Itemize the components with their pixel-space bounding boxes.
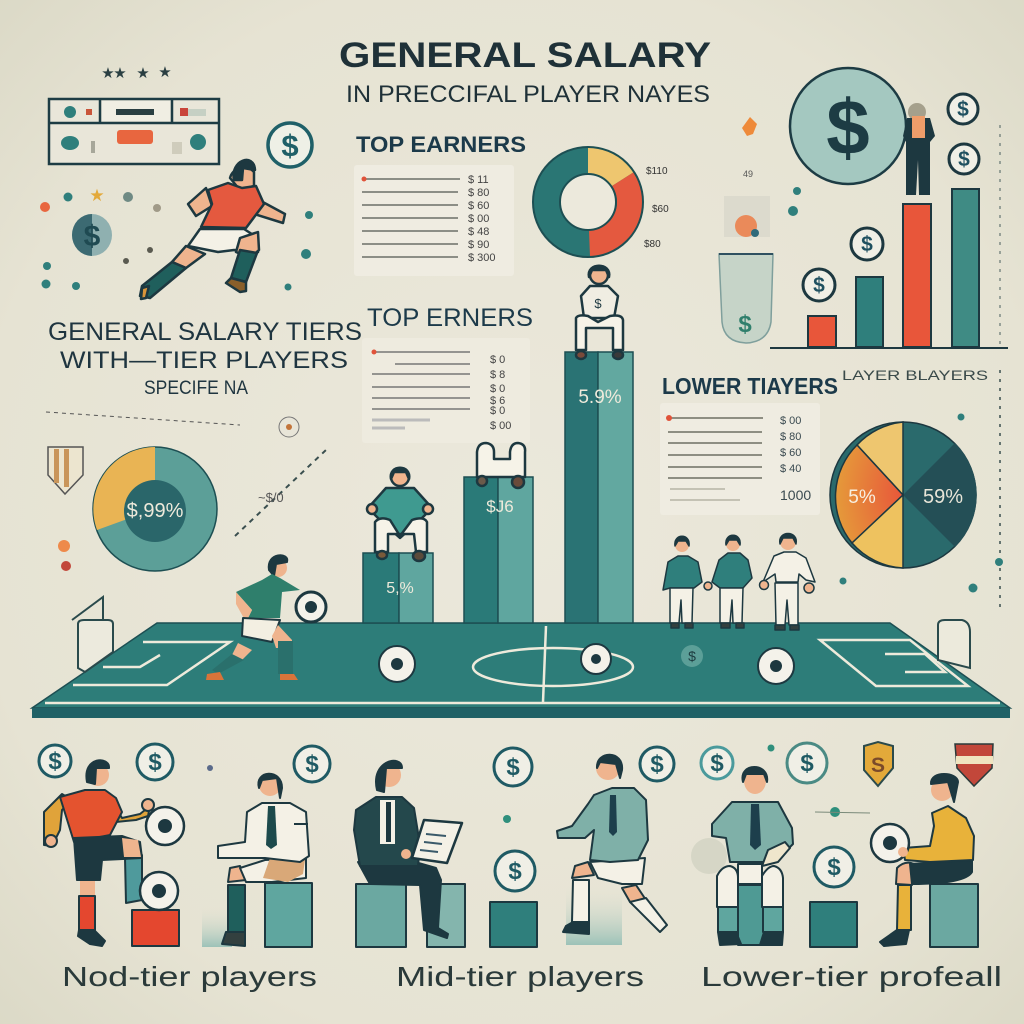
heading: top erners: TOP ERNERS xyxy=(367,304,533,332)
icon: dollar coin left with star: ★ xyxy=(89,186,105,205)
panel: lower tier table xyxy=(660,403,820,515)
panel: football field: $ xyxy=(688,648,696,664)
bar chart with coins: $ xyxy=(957,98,969,121)
figure: blue jacket seated xyxy=(691,767,857,947)
small label: dashed trend xyxy=(46,412,326,571)
icon: seated player top xyxy=(576,266,623,359)
bar chart with coins: $ xyxy=(861,233,873,256)
chart: donut top: $60 xyxy=(652,204,669,215)
icons: bottom dollar coins: $ xyxy=(827,854,841,881)
icon: stars: ★ xyxy=(113,65,127,82)
icons: bottom dollar coins: $ xyxy=(650,751,664,778)
icons: bottom dollar coins: $ xyxy=(305,751,319,778)
icons: bottom dollar coins: $ xyxy=(148,749,162,776)
icon: shields bottom right: S xyxy=(871,754,885,777)
panel: top earners table 1 xyxy=(354,165,514,276)
panel: top earners table 2: $ 00 xyxy=(490,420,511,432)
chart: pie right xyxy=(830,422,977,568)
heading: top earners: TOP EARNERS xyxy=(356,132,526,157)
panel: top earners table 1: $ 00 xyxy=(468,213,489,225)
caption: tier labels: Nod-tier players xyxy=(62,961,317,992)
chart: tall bars on field: 5,% xyxy=(386,580,414,597)
panel: football field xyxy=(32,623,1010,718)
panel: top earners table 2: $ 8 xyxy=(490,369,505,381)
icon: dollar coin top-left: $ xyxy=(281,128,299,163)
chart: donut top: $80 xyxy=(644,239,661,250)
icons: bottom dollar coins: $ xyxy=(508,858,522,885)
icons: bottom dollar coins: $ xyxy=(48,748,62,775)
icons: bottom dollar coins: $ xyxy=(710,750,724,777)
chart: pie right: 59% xyxy=(923,486,963,508)
icon: stars: ★ xyxy=(158,64,172,81)
icons: bottom dollar coins: $ xyxy=(800,750,814,777)
heading: general salary tiers: GENERAL SALARY TIERS xyxy=(48,318,362,346)
text: layer blayers: LAYER BLAYERS xyxy=(842,367,988,383)
icon: big dollar circle xyxy=(790,68,906,184)
figure: yellow shirt with ball xyxy=(871,774,978,947)
panel: scoreboard xyxy=(49,99,219,164)
icon: legs hanging on bar xyxy=(477,443,525,488)
icon: jar with coin xyxy=(719,117,801,343)
figure: businessman with clipboard xyxy=(354,761,465,947)
panel: top earners table 2: $ 6 xyxy=(490,395,505,407)
icon: stars: ★ xyxy=(136,65,150,82)
bar chart with coins: $ xyxy=(958,148,970,171)
icon: standing figure on bar xyxy=(903,103,935,195)
icons: bottom dollar coins: $ xyxy=(506,754,520,781)
icon: seated player top: $ xyxy=(594,296,602,311)
heading: general salary tiers: SPECIFE NA xyxy=(144,378,248,399)
figure: seated white shirt xyxy=(202,774,312,947)
icons: small green dots bottom xyxy=(207,744,870,823)
panel: lower tier table: $ 40 xyxy=(780,463,801,475)
chart: tall bars on field: $J6 xyxy=(486,497,514,516)
icon: stars: ★ xyxy=(101,65,115,82)
panel: top earners table 1: $ 300 xyxy=(468,252,496,264)
panel: top earners table 1: $ 90 xyxy=(468,239,489,251)
title: GENERAL SALARY xyxy=(339,36,711,75)
icon: shield xyxy=(48,447,83,494)
chart: donut top: $110 xyxy=(646,166,668,177)
heading: general salary tiers: WITH—TIER PLAYERS xyxy=(60,347,348,374)
icons: bottom dollar coins xyxy=(39,743,854,891)
chart: donut top xyxy=(533,147,669,257)
heading: lower tiayers: LOWER TIAYERS xyxy=(662,373,838,399)
panel: lower tier table: $ 60 xyxy=(780,447,801,459)
bar chart with coins xyxy=(770,94,1008,348)
icon: jar with coin: 49 xyxy=(743,169,753,179)
decorative dashed line right xyxy=(840,125,1003,610)
icon: player kicking ball xyxy=(206,555,326,680)
panel: lower tier table: $ 00 xyxy=(780,415,801,427)
caption: tier labels xyxy=(62,961,1002,992)
chart: tall bars on field: 5.9% xyxy=(578,387,622,408)
bar chart with coins: $ xyxy=(813,274,825,297)
icon: dollar coin left with star xyxy=(72,186,112,256)
panel: top earners table 2 xyxy=(362,338,530,443)
icon: running player xyxy=(140,160,285,299)
small label: dashed trend: ~$/0 xyxy=(258,490,284,505)
panel: top earners table 1: $ 60 xyxy=(468,200,489,212)
icon: goal posts xyxy=(72,597,970,672)
panel: top earners table 1: $ 11 xyxy=(468,174,489,186)
icon: seated player mid xyxy=(367,468,433,561)
panel: top earners table 2: $ 0 xyxy=(490,354,505,366)
panel: top earners table 2: $ 0 xyxy=(490,405,505,417)
icon: stars xyxy=(101,64,172,82)
chart: donut left xyxy=(93,447,217,571)
panel: top earners table 2: $ 0 xyxy=(490,383,505,395)
panel: top earners table 1: $ 48 xyxy=(468,226,489,238)
title xyxy=(339,36,711,108)
caption: tier labels: Lower-tier profeall xyxy=(701,961,1002,992)
icon: dollar coin top-left xyxy=(268,123,312,167)
caption: tier labels: Mid-tier players xyxy=(396,961,644,992)
icon: jar with coin: $ xyxy=(738,311,752,338)
panel: top earners table 1: $ 80 xyxy=(468,187,489,199)
chart: pie right: 5% xyxy=(848,487,876,508)
heading: general salary tiers xyxy=(48,318,362,399)
decorative dots left xyxy=(40,192,313,290)
title: IN PRECCIFAL PLAYER NAYES xyxy=(346,81,710,108)
figure: red shirt player xyxy=(44,760,184,946)
chart: donut left: $,99% xyxy=(127,500,184,522)
figure: teal shirt seated xyxy=(490,755,667,947)
icon: dollar coin left with star: $ xyxy=(84,220,101,253)
panel: lower tier table: 1000 xyxy=(780,487,811,503)
icon: shields bottom right xyxy=(864,742,993,786)
icon: big dollar circle: $ xyxy=(826,83,870,171)
panel: lower tier table: $ 80 xyxy=(780,431,801,443)
icon: three standing players xyxy=(663,534,815,630)
chart: tall bars on field xyxy=(363,352,633,623)
